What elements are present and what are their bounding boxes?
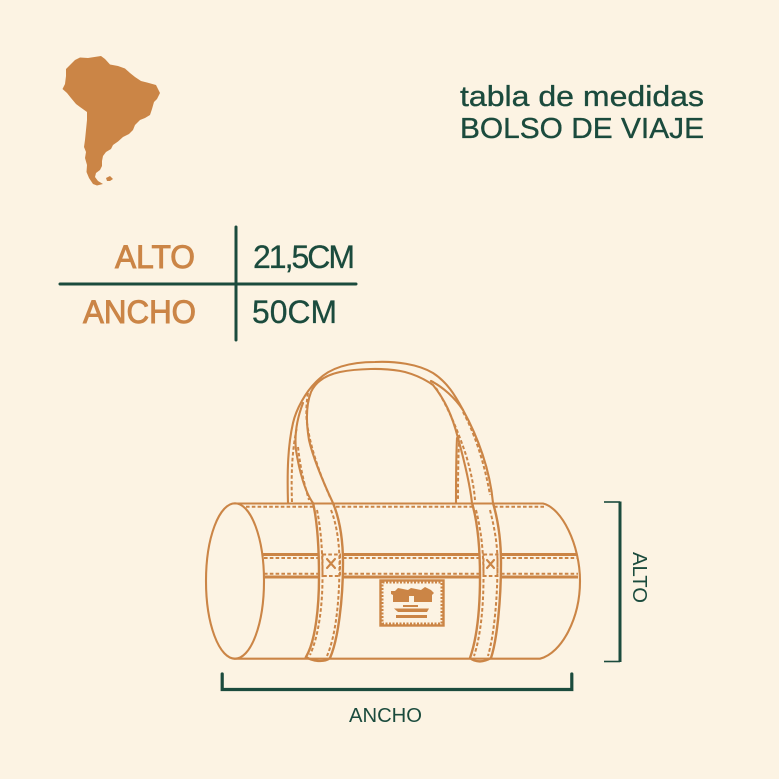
handle stitching	[292, 388, 490, 502]
measurements table	[60, 227, 356, 340]
measurements table: 21,5CM	[253, 239, 355, 275]
handle outer edge	[288, 362, 493, 503]
bag illustration	[206, 362, 580, 661]
handle inner edge	[307, 369, 472, 503]
brand label patch	[380, 580, 444, 626]
icon: South America map	[62, 56, 160, 186]
title: tabla de medidas	[460, 81, 704, 113]
top seam stitching	[246, 506, 544, 508]
bag end cap	[206, 503, 264, 659]
width dimension bracket	[222, 674, 572, 690]
front strap right	[470, 503, 501, 661]
horizontal band	[263, 554, 578, 577]
title: BOLSO DE VIAJE	[460, 113, 704, 145]
measurements table: 50CM	[252, 294, 337, 330]
front strap left	[306, 503, 343, 661]
height label: ALTO	[628, 552, 650, 603]
measurements table: ANCHO	[83, 294, 196, 330]
bag body outline	[234, 504, 580, 659]
height dimension bracket	[604, 502, 620, 662]
width label: ANCHO	[349, 705, 422, 727]
handle strap edges	[295, 381, 463, 503]
title	[460, 81, 704, 145]
measurements table: ALTO	[115, 239, 195, 275]
